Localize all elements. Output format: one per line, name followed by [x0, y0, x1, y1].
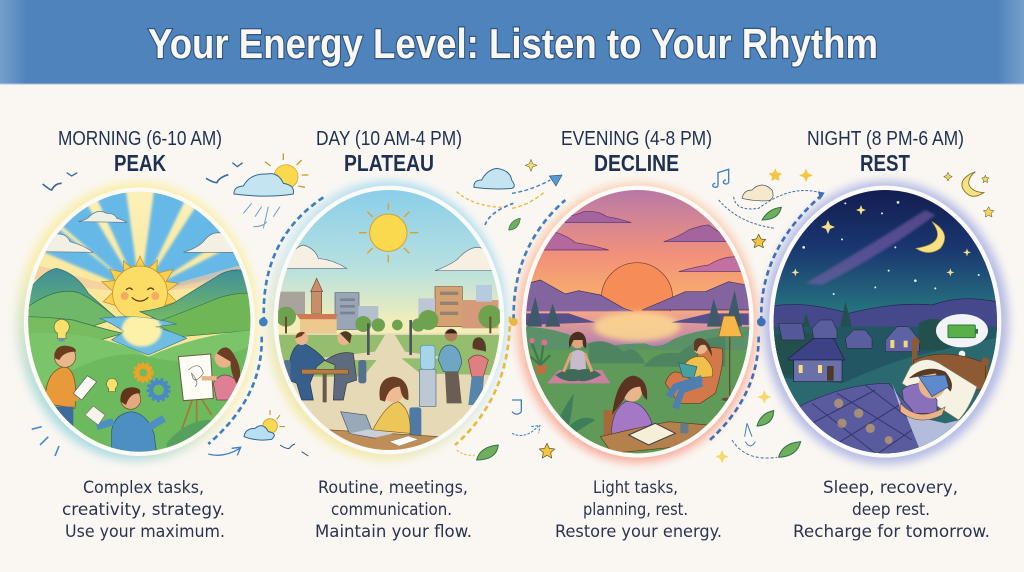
meeting table	[283, 331, 366, 402]
arrow	[208, 447, 241, 455]
armchair reader	[665, 338, 723, 408]
text block: evening	[555, 478, 722, 542]
man with puzzle	[85, 387, 164, 453]
bird	[280, 444, 308, 456]
two people talking	[438, 329, 488, 405]
woman writing	[600, 376, 709, 453]
text block: day	[315, 478, 472, 542]
panel: day heading: PLATEAU	[344, 150, 434, 176]
node	[510, 318, 518, 326]
text block: night	[793, 478, 990, 542]
bird	[67, 163, 243, 176]
panel: morning heading: MORNING (6-10 AM)	[58, 128, 222, 150]
lamp	[719, 316, 742, 401]
panel: left illustrations	[17, 153, 514, 463]
woman at laptop	[329, 376, 439, 450]
icon: gears	[107, 363, 170, 401]
lake	[100, 313, 187, 355]
morning circle	[17, 182, 260, 463]
text block: morning: creativity, strategy.	[62, 500, 225, 520]
text block: day: Maintain your flow.	[315, 522, 472, 542]
star	[769, 168, 813, 182]
yellow dash	[512, 193, 544, 208]
man with notebook	[46, 346, 97, 426]
marks	[32, 427, 59, 456]
text block: day: communication.	[331, 500, 452, 520]
text block: morning	[62, 478, 225, 542]
sparkle	[525, 159, 537, 171]
text block: evening: planning, rest.	[583, 500, 688, 520]
panel: night heading: NIGHT (8 PM-6 AM)	[807, 128, 964, 150]
city buildings	[277, 278, 498, 336]
setting sun	[601, 262, 673, 312]
text block: evening: Light tasks,	[593, 478, 678, 498]
leaf	[509, 218, 520, 230]
yellow and blue connectors upper	[457, 192, 503, 207]
music note	[745, 423, 755, 446]
milky way	[805, 210, 935, 285]
text block: night: deep rest.	[852, 500, 930, 520]
trees	[276, 305, 502, 333]
bird	[43, 183, 62, 190]
night circle	[763, 181, 1009, 464]
title: Your Energy Level: Listen to Your Rhythm	[148, 20, 878, 67]
icon: lightbulb	[54, 319, 69, 341]
plant pot	[529, 338, 550, 374]
stars	[791, 201, 980, 295]
text block: night: Sleep, recovery,	[823, 478, 958, 498]
sleeper	[902, 383, 937, 413]
text block: morning: Complex tasks,	[83, 478, 204, 498]
connector node	[757, 318, 766, 326]
panel: morning heading: PEAK	[114, 150, 166, 176]
text block: evening: Restore your energy.	[555, 522, 722, 542]
panel: evening heading: EVENING (4-8 PM)	[561, 128, 712, 150]
panel: day heading	[316, 128, 462, 176]
dashed arrow low	[512, 425, 540, 435]
bed	[800, 338, 990, 454]
panel: day heading: DAY (10 AM-4 PM)	[316, 128, 462, 150]
connector node	[259, 318, 268, 326]
connector day to evening	[514, 200, 565, 320]
text block: morning: Use your maximum.	[65, 522, 225, 542]
panel: evening heading: DECLINE	[594, 150, 679, 176]
note	[512, 400, 521, 414]
leaf	[757, 411, 774, 426]
leaf	[779, 442, 801, 457]
dashed trail	[732, 440, 777, 458]
title banner	[0, 0, 1024, 84]
panel: morning heading	[58, 128, 222, 176]
evening circle	[516, 183, 758, 463]
easel and painter	[178, 347, 240, 430]
panel: night heading: REST	[860, 150, 910, 176]
bird	[206, 175, 228, 183]
thought bubble with battery	[936, 314, 988, 356]
small cloud and sun top	[234, 153, 308, 228]
hills	[769, 299, 1002, 357]
star	[752, 234, 766, 248]
panel: night heading	[807, 128, 964, 176]
arrow tip	[549, 175, 562, 186]
leaf	[477, 445, 498, 460]
small cloud	[474, 168, 514, 189]
arrow tip	[818, 191, 825, 200]
quilt	[800, 383, 922, 454]
icon: smiling sun	[102, 256, 178, 321]
lake	[522, 311, 755, 348]
mountains	[522, 280, 637, 313]
cloud with trail	[719, 185, 822, 228]
fern	[560, 394, 595, 432]
moon	[916, 222, 945, 252]
yellow dashed connector	[455, 317, 510, 445]
leaf	[762, 207, 781, 220]
day circle	[266, 181, 507, 463]
village houses	[779, 320, 919, 382]
icon: small sun behind cloud	[244, 410, 285, 440]
icon: sun	[359, 203, 418, 263]
crescent moon	[962, 172, 984, 196]
yoga woman	[547, 332, 610, 383]
dashed arrow	[512, 180, 550, 193]
panel: right illustrations	[509, 159, 1009, 464]
dashed connector morning to day	[208, 197, 323, 444]
star	[539, 443, 555, 458]
water cooler	[419, 345, 436, 407]
connector evening to night	[708, 195, 822, 442]
music note	[713, 169, 729, 187]
panel: evening heading	[561, 128, 712, 176]
lamp posts	[368, 320, 411, 355]
stars near moon	[944, 172, 994, 217]
text block: day: Routine, meetings,	[318, 478, 468, 498]
star sparkle	[715, 390, 771, 463]
text block: night: Recharge for tomorrow.	[793, 522, 990, 542]
